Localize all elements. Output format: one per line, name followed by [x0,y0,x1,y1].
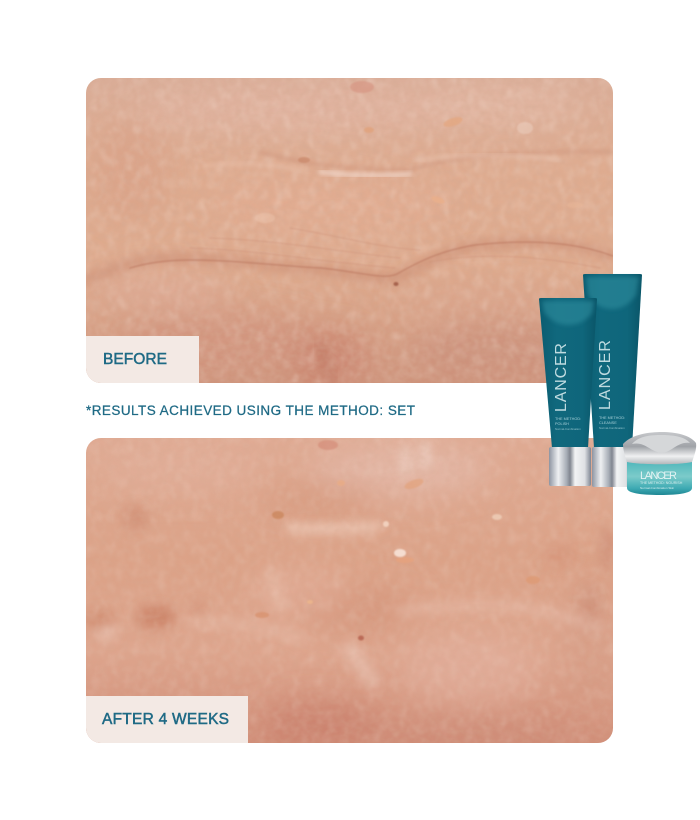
before wrinkle lines [86,152,613,383]
label: after 4 weeks: AFTER 4 WEEKS [102,711,229,728]
after skin highlights texture [86,438,613,743]
panel: before photo [86,78,613,390]
after skin spots [255,440,540,640]
product: cleanse tube: Normal-Combination [599,426,625,430]
product: polish tube: Normal-Combination [555,427,581,431]
product: nourish jar: LANCER [640,470,677,482]
product group: method set [539,274,696,495]
product: nourish jar [623,432,696,495]
product: cleanse tube: THE METHOD: [599,416,625,420]
product: polish tube [539,298,597,486]
product: polish tube: THE METHOD: [555,417,581,421]
label: after 4 weeks [86,696,248,743]
product: polish tube: POLISH [555,422,569,426]
product: cleanse tube [583,274,642,487]
before skin highlights texture [86,78,613,383]
product: polish tube: LANCER [553,343,570,412]
before skin base [86,78,613,383]
label: before: BEFORE [103,351,167,368]
panel: after photo [85,438,620,751]
before skin tone variation [116,95,544,383]
after skin base [86,438,613,743]
after skin tone variation [270,445,530,742]
product: nourish jar: Normal-Combination Skin [640,486,675,490]
after skin pore texture [150,616,347,736]
before skin spots [256,81,533,287]
after skin blotches [85,505,614,641]
before skin pore texture [88,85,526,382]
label: before [86,336,199,383]
product: cleanse tube: CLEANSE [599,421,617,425]
product: nourish jar: THE METHOD: NOURISH [640,481,683,485]
product: cleanse tube: LANCER [597,340,614,410]
after light bands [190,445,600,680]
footnote text: *RESULTS ACHIEVED USING THE METHOD: SET [86,403,415,418]
